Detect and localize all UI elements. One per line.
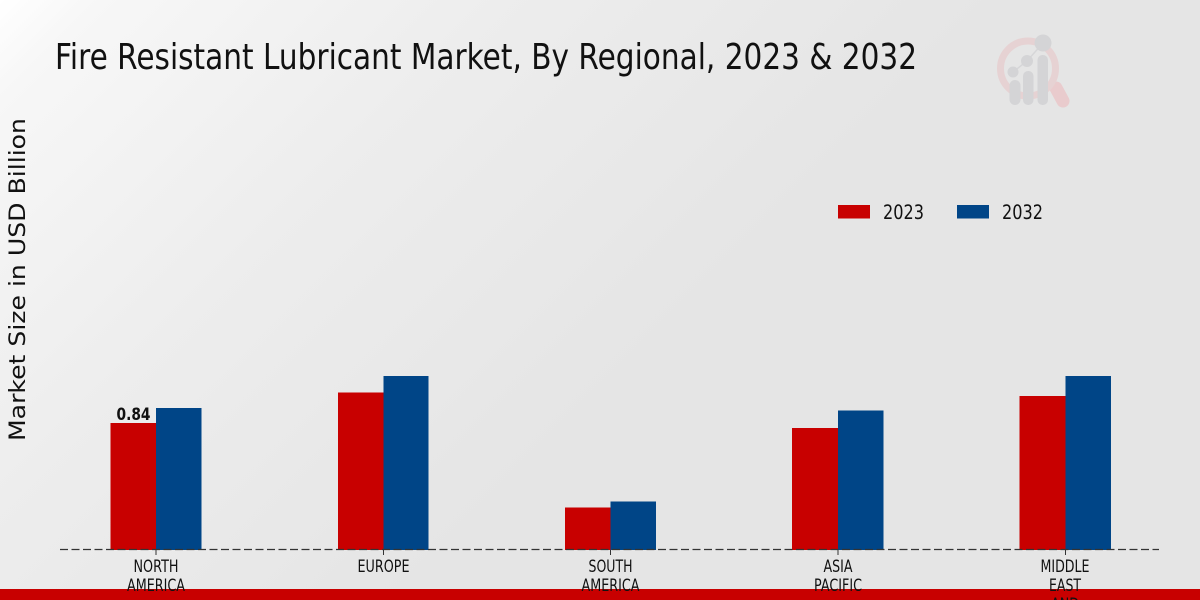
x label: North America: NORTH bbox=[134, 557, 178, 576]
x label: Middle East and Africa: EAST bbox=[1049, 576, 1082, 595]
bars: Asia Pacific bbox=[792, 410, 884, 550]
bars: Europe bbox=[338, 376, 428, 550]
y axis label: Market Size in USD Billion bbox=[6, 118, 31, 441]
legend item: 2023: 2023 bbox=[883, 201, 924, 224]
x label: Asia Pacific: PACIFIC bbox=[814, 576, 862, 595]
x label: Europe: EUROPE bbox=[358, 557, 410, 576]
x label: North America: AMERICA bbox=[127, 576, 186, 595]
legend item: 2023 bbox=[838, 201, 924, 224]
x label: South America: SOUTH bbox=[588, 557, 632, 576]
bar chart bbox=[60, 376, 1159, 555]
bars: South America bbox=[565, 502, 656, 550]
footer red band bbox=[0, 589, 1200, 600]
bars: North America bbox=[110, 405, 202, 550]
legend item: 2032 bbox=[957, 201, 1043, 224]
icon: magnifier logo watermark bbox=[1000, 34, 1063, 105]
legend item: 2032: 2032 bbox=[1002, 201, 1043, 224]
x label: South America: AMERICA bbox=[582, 576, 640, 595]
value label: 0.84 bbox=[116, 405, 150, 424]
legend bbox=[838, 201, 1043, 224]
x axis bbox=[60, 548, 1159, 550]
x label: Middle East and Africa: MIDDLE bbox=[1040, 557, 1090, 576]
title: Fire Resistant Lubricant Market, By Regional, 2023 & 2032 bbox=[55, 37, 917, 78]
bars: Middle East and Africa bbox=[1020, 376, 1111, 550]
x label: Asia Pacific: ASIA bbox=[824, 557, 853, 576]
